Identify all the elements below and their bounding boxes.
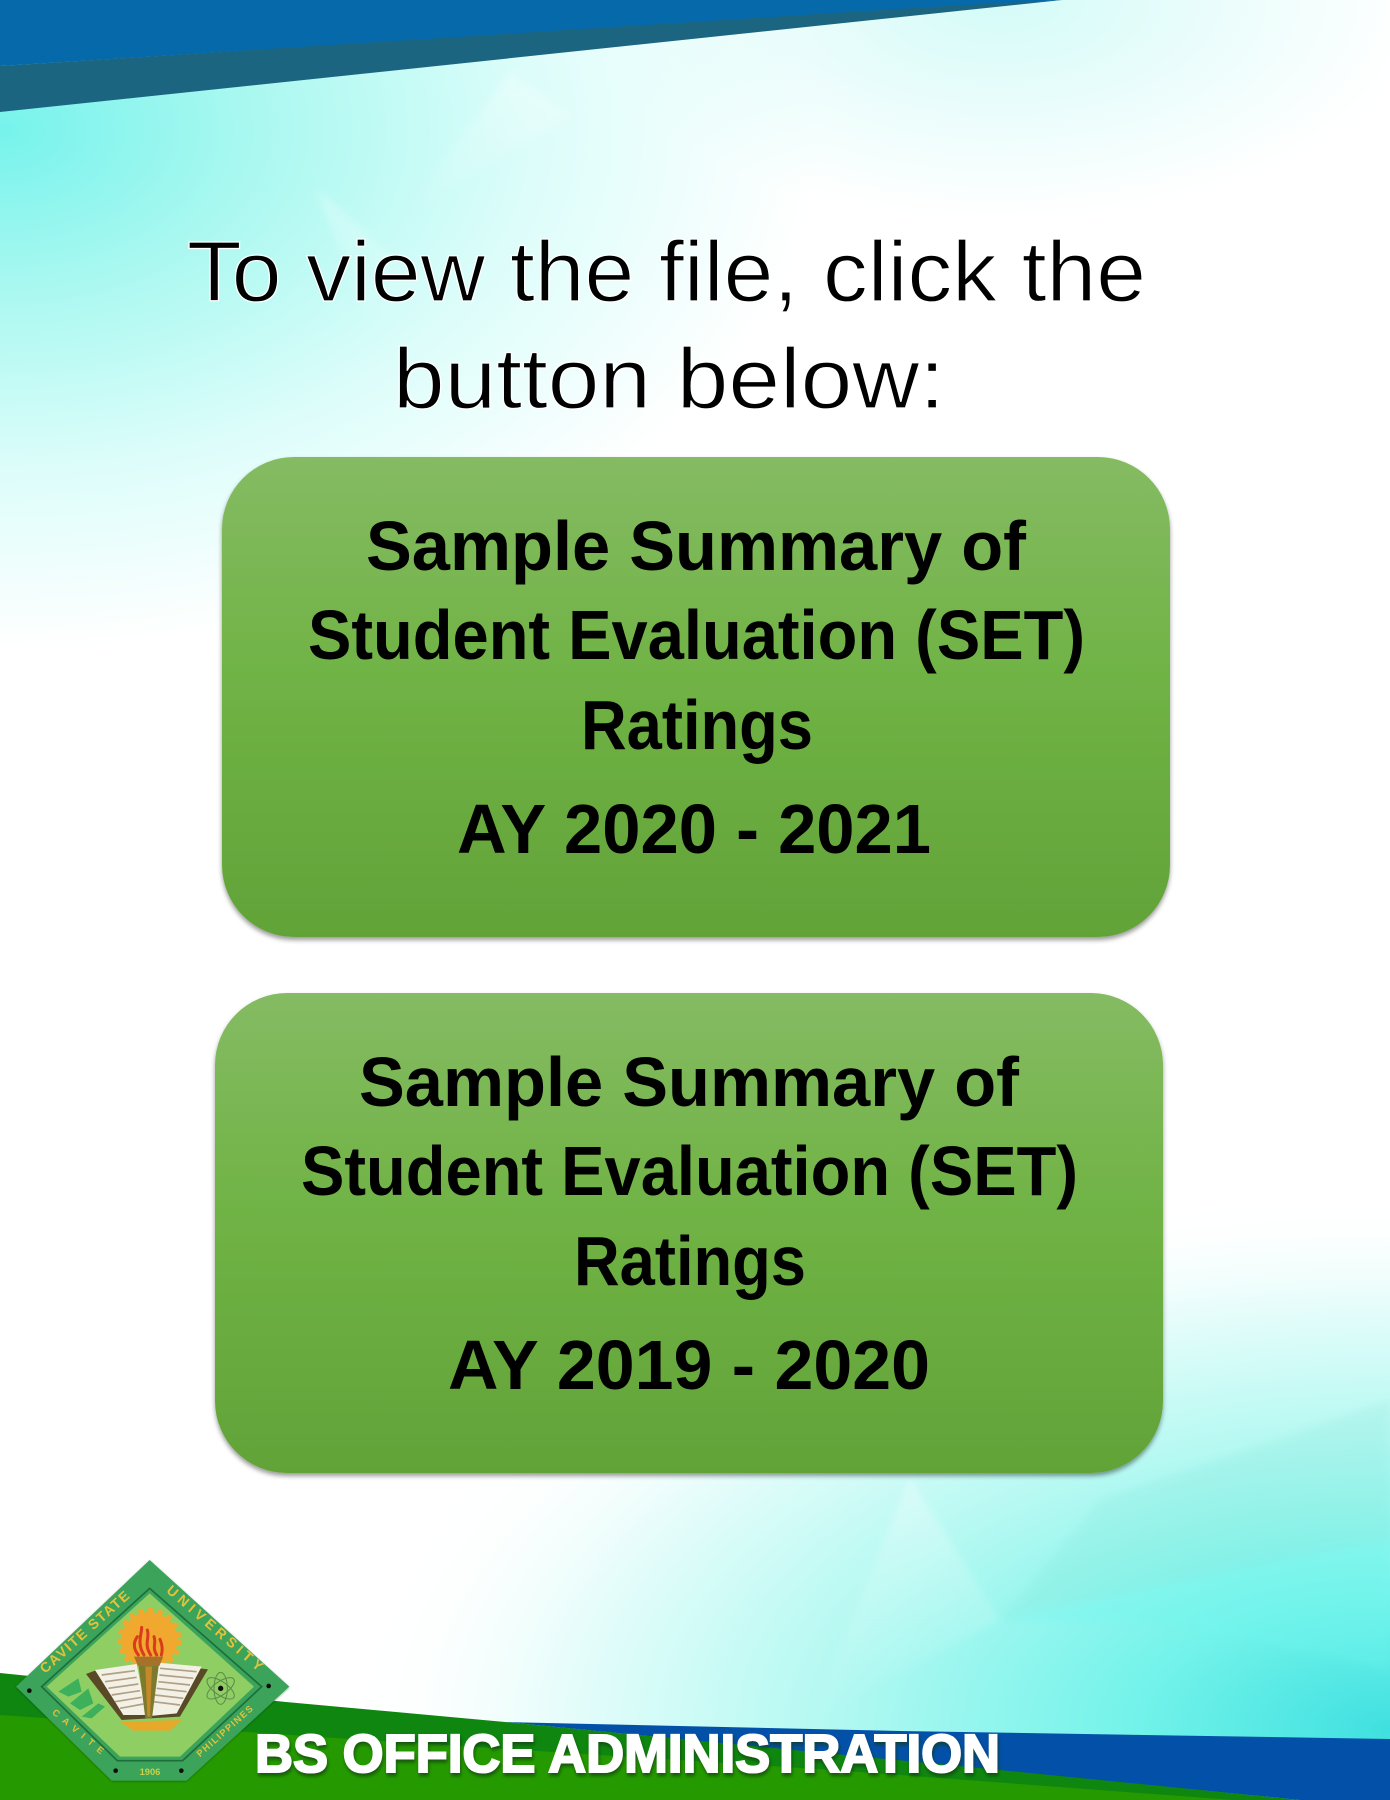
logo lettering: 1906: [140, 1767, 160, 1777]
logo sun: [121, 1612, 177, 1668]
logo book: [86, 1663, 208, 1731]
button: SET ratings AY 2020-2021: Sample Summary of: [366, 507, 1027, 585]
button: SET ratings AY 2019-2020: Ratings: [574, 1222, 806, 1300]
heading: to view the file: button below:: [393, 332, 945, 427]
logo torch: [134, 1627, 163, 1718]
button: SET ratings AY 2019-2020: [215, 993, 1163, 1473]
logo plant: [58, 1678, 105, 1718]
logo lettering: PHILIPPINES: [196, 1706, 252, 1757]
button: SET ratings AY 2019-2020: AY 2019 - 2020: [448, 1326, 930, 1404]
footer band: [0, 1673, 1390, 1800]
logo lettering: CAVITE: [53, 1710, 104, 1754]
button: SET ratings AY 2020-2021: Ratings: [581, 686, 813, 764]
logo lettering: UNIVERSITY: [168, 1584, 264, 1670]
heading: to view the file: [187, 225, 1146, 427]
footer title: BS Office Administration: BS OFFICE ADMINISTRATION: [255, 1724, 1000, 1784]
button: SET ratings AY 2019-2020: Student Evaluation (SET): [301, 1132, 1078, 1210]
logo rivets: [27, 1684, 271, 1773]
logo lettering: [40, 1584, 264, 1777]
button: SET ratings AY 2020-2021: Student Evaluation (SET): [308, 596, 1085, 674]
top banner: [0, 0, 1062, 112]
heading: to view the file: To view the file, click the: [187, 225, 1146, 320]
button: SET ratings AY 2020-2021: [222, 457, 1170, 937]
button: SET ratings AY 2020-2021: AY 2020 - 2021: [457, 790, 931, 868]
logo atom: [204, 1672, 238, 1704]
logo lettering: CAVITE STATE: [40, 1590, 130, 1672]
logo: Cavite State University seal: [16, 1560, 290, 1782]
button: SET ratings AY 2019-2020: Sample Summary of: [359, 1043, 1020, 1121]
